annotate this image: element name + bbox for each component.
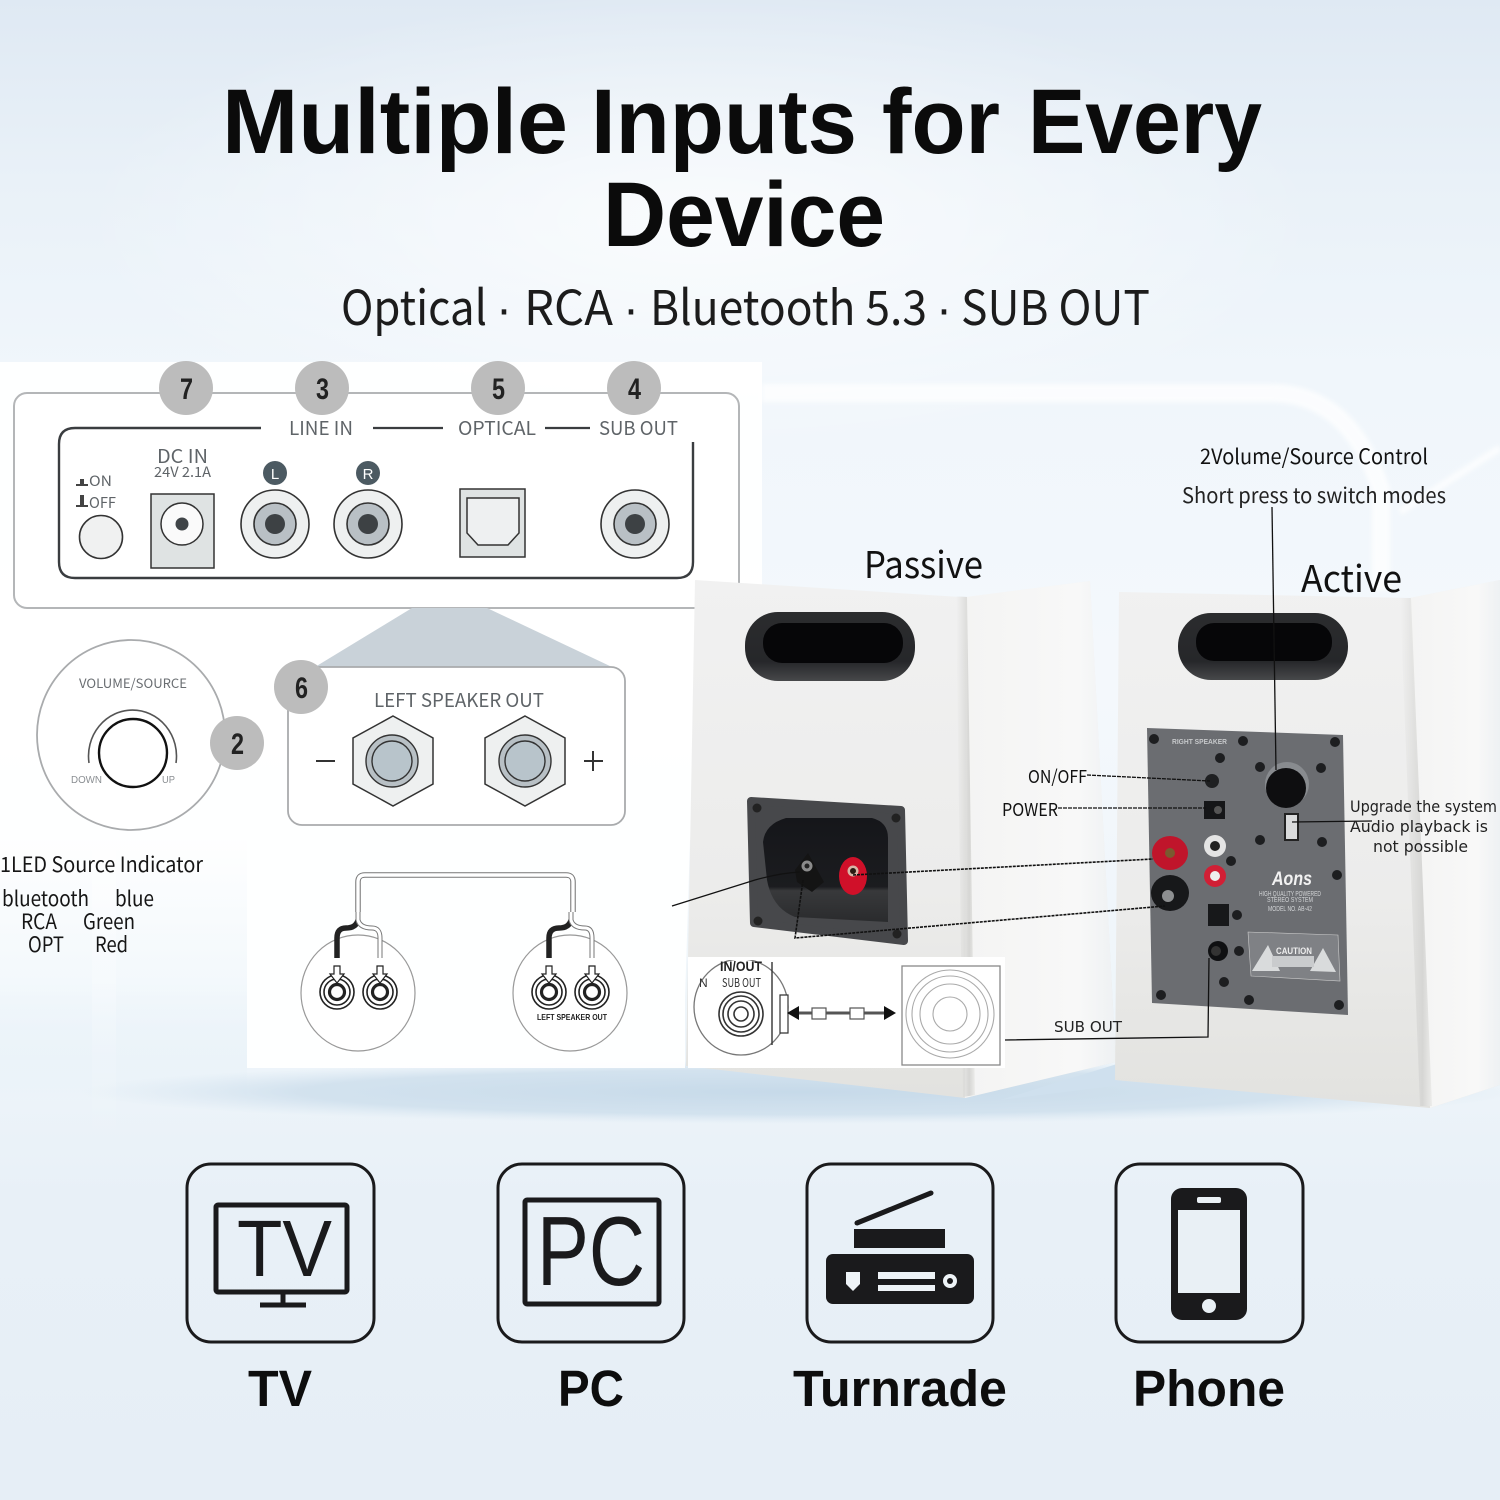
title	[222, 71, 1262, 266]
speaker and control labels: Short press to switch modes	[1182, 480, 1446, 510]
port labels: SUB OUT	[599, 414, 678, 441]
RCA L: L	[271, 466, 279, 483]
title: Inputs	[591, 71, 857, 173]
title: for	[882, 71, 1000, 173]
subwoofer connection diagram: N	[699, 976, 708, 990]
speaker and control labels: Passive	[864, 535, 983, 589]
number badges: 4	[628, 373, 641, 406]
port labels: OFF	[89, 492, 116, 513]
subtitle: ·	[623, 283, 639, 336]
RCA R: R	[363, 466, 374, 483]
speaker and control labels: SUB OUT	[1054, 1018, 1123, 1036]
device labels: PC	[558, 1360, 624, 1417]
left speaker out diagram: LEFT SPEAKER OUT	[374, 686, 544, 713]
port labels	[89, 414, 678, 513]
left speaker out diagram	[274, 660, 625, 825]
device labels: TV	[248, 1360, 312, 1417]
volume knob diagram	[37, 640, 264, 830]
LED source indicator text: bluetooth	[2, 883, 89, 913]
subwoofer connection diagram	[688, 957, 1005, 1068]
LED source indicator text: OPT	[28, 929, 64, 959]
amplifier plate: CAUTION	[1276, 946, 1312, 956]
subwoofer connection diagram: IN/OUT	[720, 958, 762, 974]
speaker and control labels: Audio playback is	[1350, 817, 1488, 836]
icon card: phone	[1116, 1164, 1303, 1342]
sub out port	[601, 490, 669, 558]
subtitle	[341, 269, 1150, 339]
speaker and control labels: 2Volume/Source Control	[1200, 441, 1428, 471]
speaker and control labels: ON/OFF	[1028, 763, 1087, 789]
port labels: OPTICAL	[458, 414, 536, 441]
subtitle: Bluetooth 5.3	[650, 269, 927, 339]
port labels: 24V 2.1A	[154, 462, 212, 482]
amplifier plate: MODEL NO. AB-42	[1268, 906, 1312, 913]
port labels: ON	[89, 471, 112, 491]
subtitle: ·	[496, 283, 512, 336]
LED source indicator text: Green	[83, 906, 135, 936]
icon card: TV: TV	[237, 1204, 333, 1293]
icon card: TV	[187, 1164, 374, 1342]
speaker and control labels: Active	[1301, 549, 1402, 603]
subtitle: RCA	[524, 269, 613, 339]
number badges: 5	[492, 373, 505, 406]
subtitle: ·	[936, 283, 952, 336]
volume knob diagram: UP	[162, 775, 175, 786]
passive speaker	[686, 580, 1116, 1098]
LED source indicator text: Red	[95, 929, 128, 959]
number badges: 7	[180, 373, 193, 406]
left speaker out diagram: 6	[295, 672, 308, 705]
icon card: PC: PC	[537, 1196, 645, 1306]
white backing panel	[0, 362, 762, 1068]
port labels: LINE IN	[289, 414, 353, 441]
power switch	[76, 479, 122, 558]
title: Multiple	[222, 71, 568, 173]
amplifier plate: RIGHT SPEAKER	[1172, 737, 1228, 746]
device labels	[248, 1360, 1285, 1417]
speaker and control labels: POWER	[1002, 796, 1058, 822]
optical port	[460, 489, 525, 557]
LED source indicator text: RCA	[21, 906, 57, 936]
LED source indicator text: 1LED Source Indicator	[0, 849, 204, 879]
LED source indicator text: blue	[115, 883, 154, 913]
RCA R	[334, 461, 402, 558]
rear input panel diagram	[14, 361, 739, 608]
device labels: Turnrade	[793, 1360, 1007, 1417]
amplifier plate: STEREO SYSTEM	[1267, 897, 1313, 904]
volume knob diagram: 2	[231, 728, 244, 761]
title: Every	[1028, 71, 1262, 173]
icon card: PC	[498, 1164, 684, 1342]
active speaker port	[1178, 613, 1348, 680]
subtitle: SUB OUT	[961, 269, 1150, 339]
port labels: DC IN	[157, 442, 208, 469]
icon card: turntable	[807, 1164, 993, 1342]
speaker and control labels	[864, 441, 1497, 1036]
DC jack	[151, 494, 214, 568]
connector wedge	[315, 608, 612, 667]
speaker wiring diagram: LEFT SPEAKER OUT	[537, 1012, 608, 1022]
device labels: Phone	[1133, 1360, 1285, 1417]
passive speaker port	[745, 612, 915, 681]
active speaker	[1115, 580, 1500, 1108]
amplifier plate	[1147, 728, 1348, 1015]
callout leader lines	[672, 507, 1372, 1040]
RCA L	[241, 461, 309, 558]
amplifier plate: HIGH QUALITY POWERED	[1259, 891, 1321, 898]
passive terminal plate	[751, 801, 904, 941]
speaker and control labels: not possible	[1373, 837, 1468, 856]
volume knob diagram: DOWN	[71, 775, 102, 786]
subwoofer connection diagram: SUB OUT	[722, 974, 761, 991]
subtitle: Optical	[341, 269, 487, 339]
speaker wiring diagram	[301, 875, 627, 1051]
LED source indicator text	[0, 849, 204, 959]
number badges	[159, 361, 661, 415]
number badges: 3	[316, 373, 329, 406]
title: Device	[603, 164, 885, 266]
amplifier plate: Aons	[1271, 869, 1312, 890]
volume knob diagram: VOLUME/SOURCE	[79, 673, 187, 692]
